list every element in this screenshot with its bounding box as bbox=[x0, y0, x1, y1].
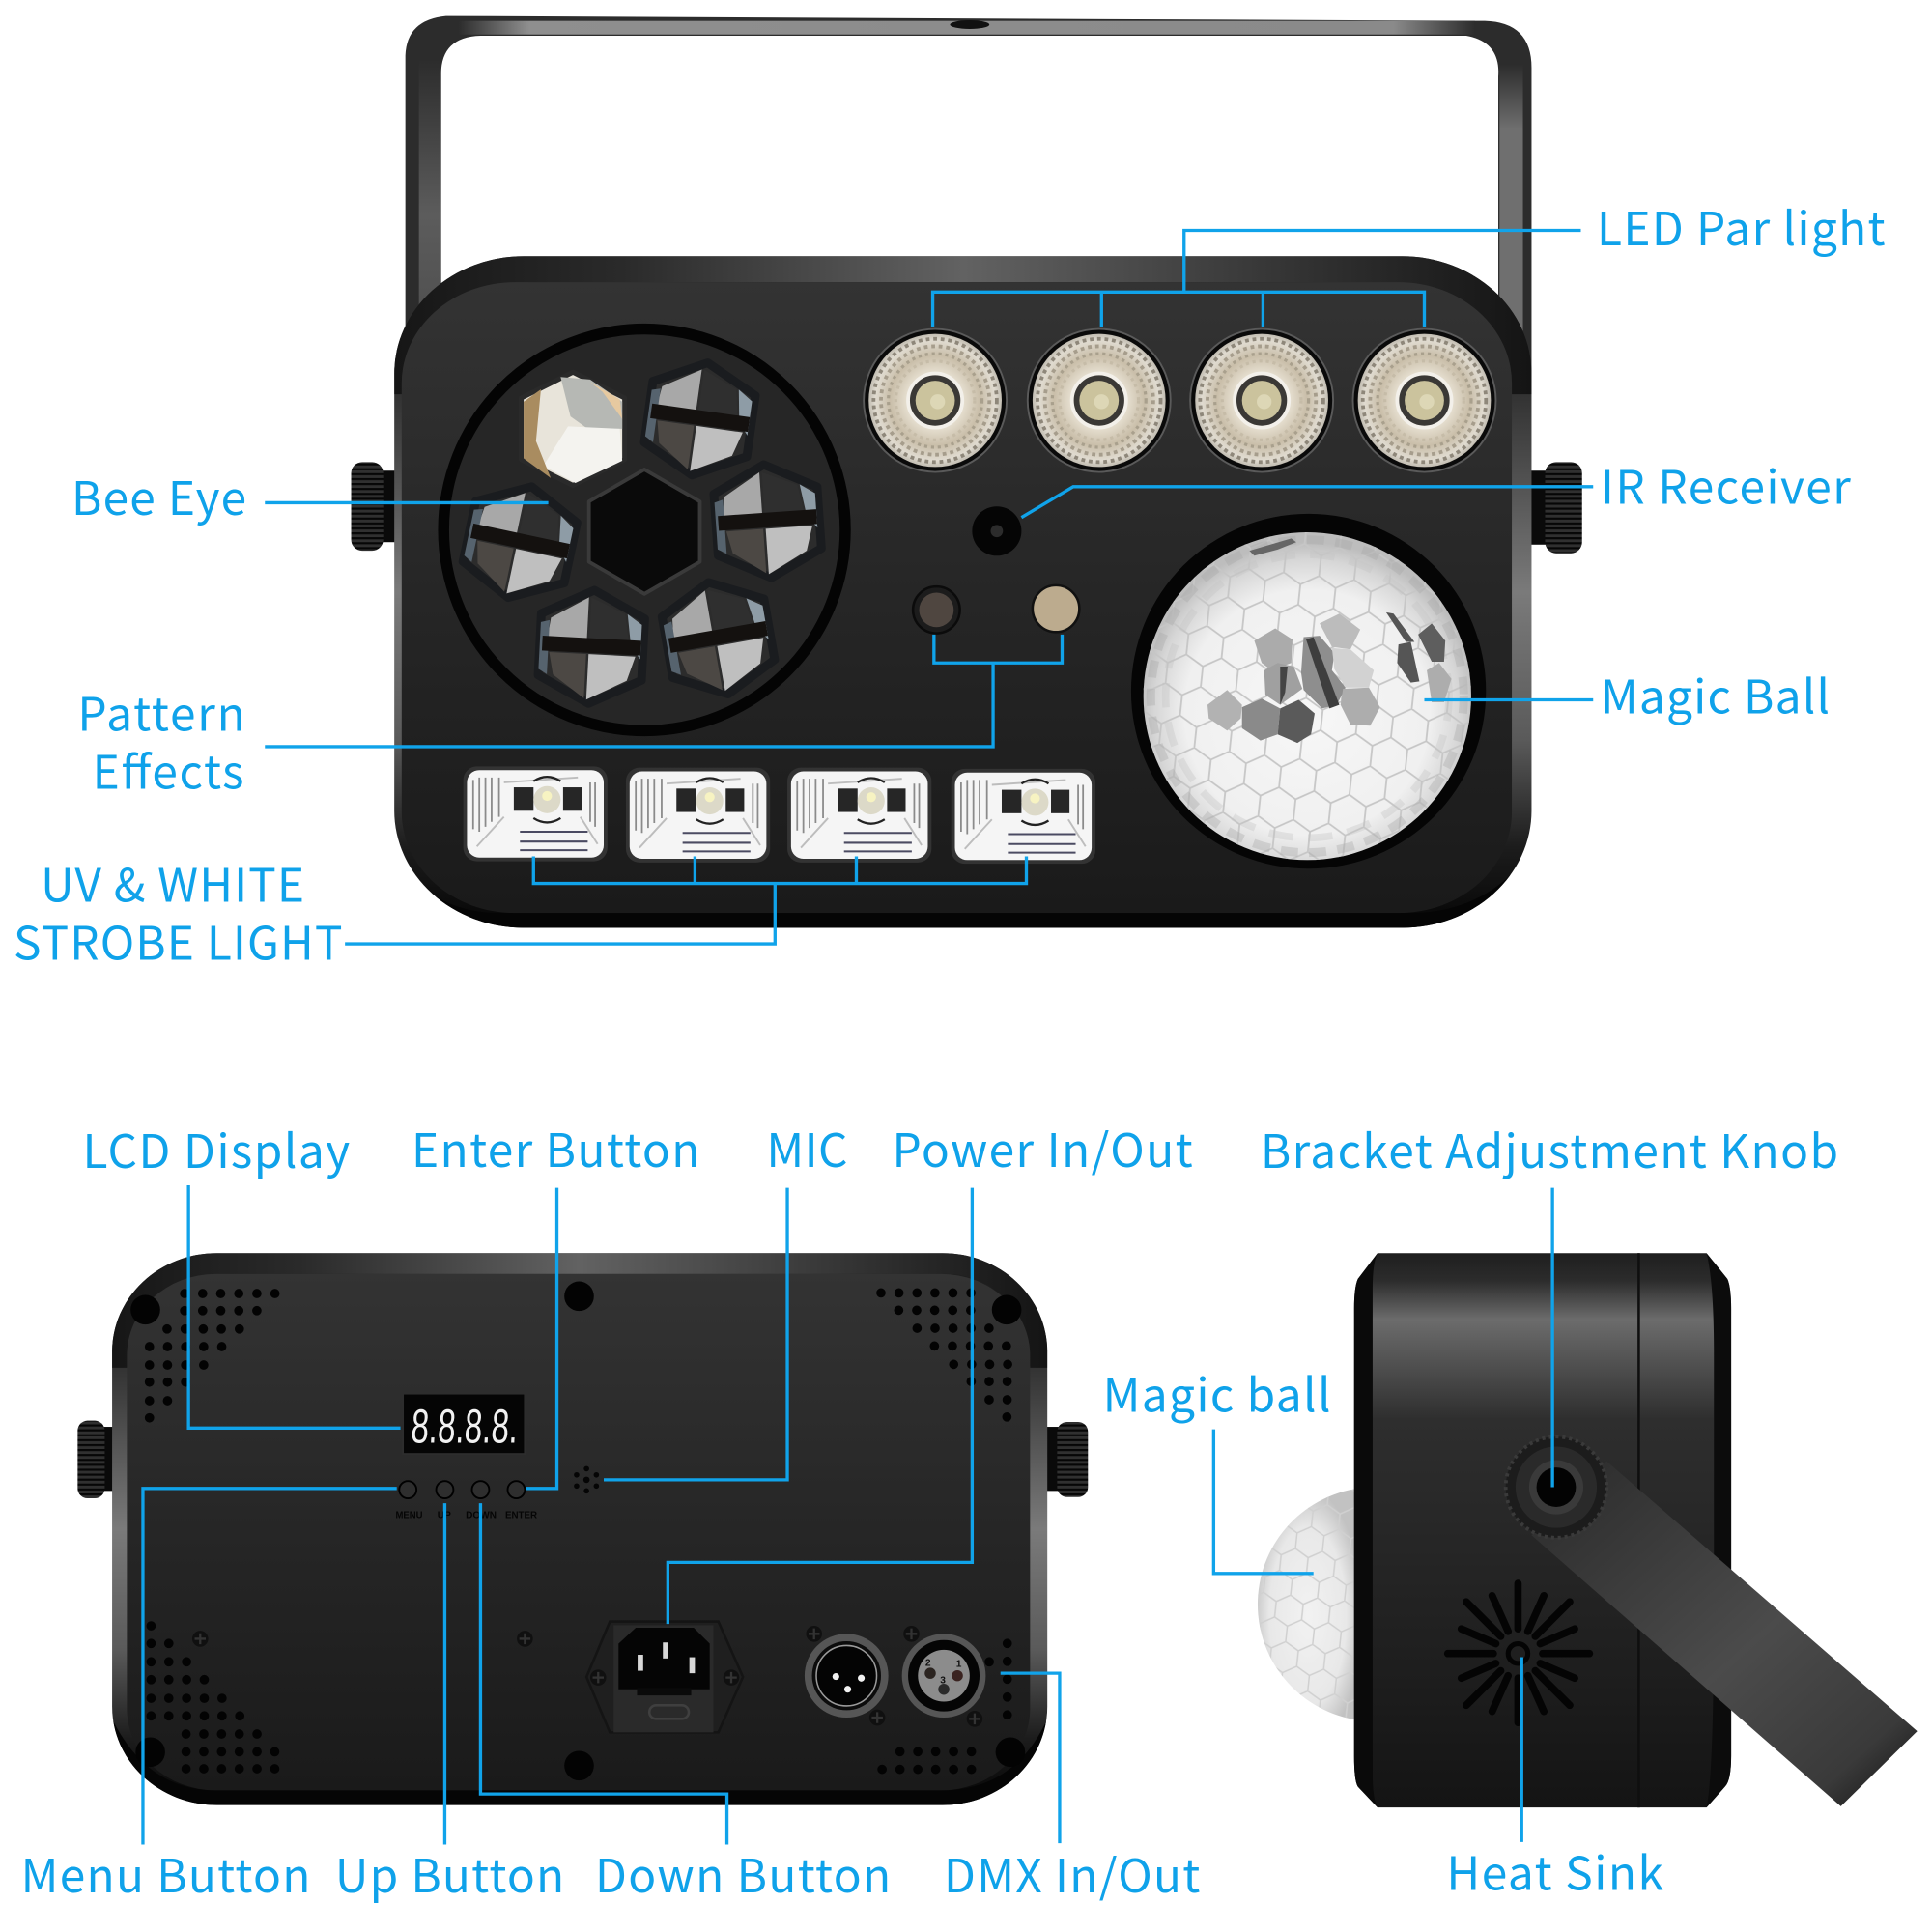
label: Bee Eye: Bee Eye bbox=[71, 462, 246, 528]
side body bbox=[1354, 1253, 1731, 1807]
side view of the light fixture bbox=[1258, 1253, 1918, 1807]
lens bottom right bbox=[658, 574, 780, 703]
label: LCD Display: LCD Display bbox=[82, 1115, 350, 1181]
label: IR Receiver: IR Receiver bbox=[1601, 451, 1851, 518]
label: UV and white strobe light bbox=[14, 849, 343, 974]
lens top right bbox=[640, 355, 759, 482]
XLR female connector: 2 bbox=[925, 1658, 931, 1668]
XLR female connector: 1 bbox=[956, 1660, 962, 1670]
lens bottom left bbox=[537, 587, 646, 706]
label: Up Button: Up Button bbox=[335, 1839, 564, 1906]
adjustment knob left bbox=[352, 462, 398, 551]
protruding magic ball bbox=[1258, 1489, 1358, 1720]
small screws bbox=[192, 1626, 982, 1727]
hanging bracket bbox=[406, 16, 1531, 388]
label: Heat Sink: Heat Sink bbox=[1446, 1837, 1663, 1904]
label: Pattern Effects: Pattern bbox=[77, 677, 245, 744]
label: Power In/Out: Power In/Out bbox=[892, 1114, 1193, 1180]
XLR male connector bbox=[805, 1634, 889, 1718]
front view of the light fixture bbox=[352, 16, 1582, 927]
rear knob right bbox=[1045, 1422, 1088, 1497]
pattern effects lenses bbox=[913, 585, 1079, 634]
leader lines for front view bbox=[265, 231, 1593, 944]
label: Menu Button: Menu Button bbox=[21, 1839, 310, 1906]
control buttons with labels: DOWN bbox=[466, 1510, 497, 1520]
lens right bbox=[712, 461, 823, 582]
rear body bbox=[112, 1253, 1047, 1805]
control buttons with labels: UP bbox=[438, 1510, 451, 1520]
magic ball bbox=[1131, 514, 1486, 868]
label: Bracket Adjustment Knob: Bracket Adjustment Knob bbox=[1261, 1115, 1838, 1181]
bee eye module bbox=[443, 329, 845, 730]
leader lines for rear view bbox=[143, 1185, 1060, 1844]
control buttons with labels: ENTER bbox=[505, 1510, 538, 1520]
XLR female connector: 3 bbox=[940, 1675, 946, 1686]
leader lines for side view bbox=[1213, 1188, 1552, 1842]
microphone holes bbox=[574, 1466, 599, 1493]
label: Pattern Effects: Effects bbox=[93, 735, 244, 802]
label: Magic ball: Magic ball bbox=[1103, 1359, 1331, 1426]
label: DMX In/Out: DMX In/Out bbox=[944, 1839, 1200, 1906]
rear knob left bbox=[77, 1421, 116, 1498]
label: Down Button: Down Button bbox=[595, 1839, 891, 1906]
rear view of the light fixture bbox=[77, 1253, 1088, 1805]
XLR female connector bbox=[902, 1634, 985, 1718]
control buttons with labels: MENU bbox=[395, 1510, 422, 1520]
dark facets inside the ball bbox=[1208, 538, 1452, 743]
control buttons with labels bbox=[395, 1481, 538, 1520]
UV and white strobe lights bbox=[464, 766, 1095, 864]
centre hexagon bbox=[589, 469, 699, 594]
label: MIC: MIC bbox=[766, 1114, 848, 1180]
adjustment knob right bbox=[1528, 462, 1582, 554]
LCD display: 8.8.8.8. bbox=[410, 1400, 520, 1453]
IR receiver bbox=[972, 506, 1021, 555]
front body bbox=[394, 256, 1531, 927]
mounting holes bbox=[130, 1282, 1025, 1780]
label: Pattern Effects bbox=[77, 677, 245, 802]
LED par lights bbox=[864, 329, 1495, 472]
lens left bbox=[458, 476, 582, 609]
lens top left bbox=[522, 372, 625, 486]
label: UV and white strobe light: STROBE LIGHT bbox=[14, 907, 343, 974]
bracket arm bbox=[1531, 1462, 1918, 1806]
heat sink vents bbox=[1448, 1583, 1589, 1722]
label: UV and white strobe light: UV & WHITE bbox=[41, 849, 304, 916]
bracket knob bbox=[1506, 1436, 1606, 1538]
label: LED Par light: LED Par light bbox=[1597, 192, 1886, 259]
power socket bbox=[586, 1622, 743, 1732]
speaker grille dots bbox=[150, 1293, 1008, 1770]
label: Magic Ball: Magic Ball bbox=[1601, 661, 1830, 727]
label: Enter Button: Enter Button bbox=[412, 1114, 699, 1180]
